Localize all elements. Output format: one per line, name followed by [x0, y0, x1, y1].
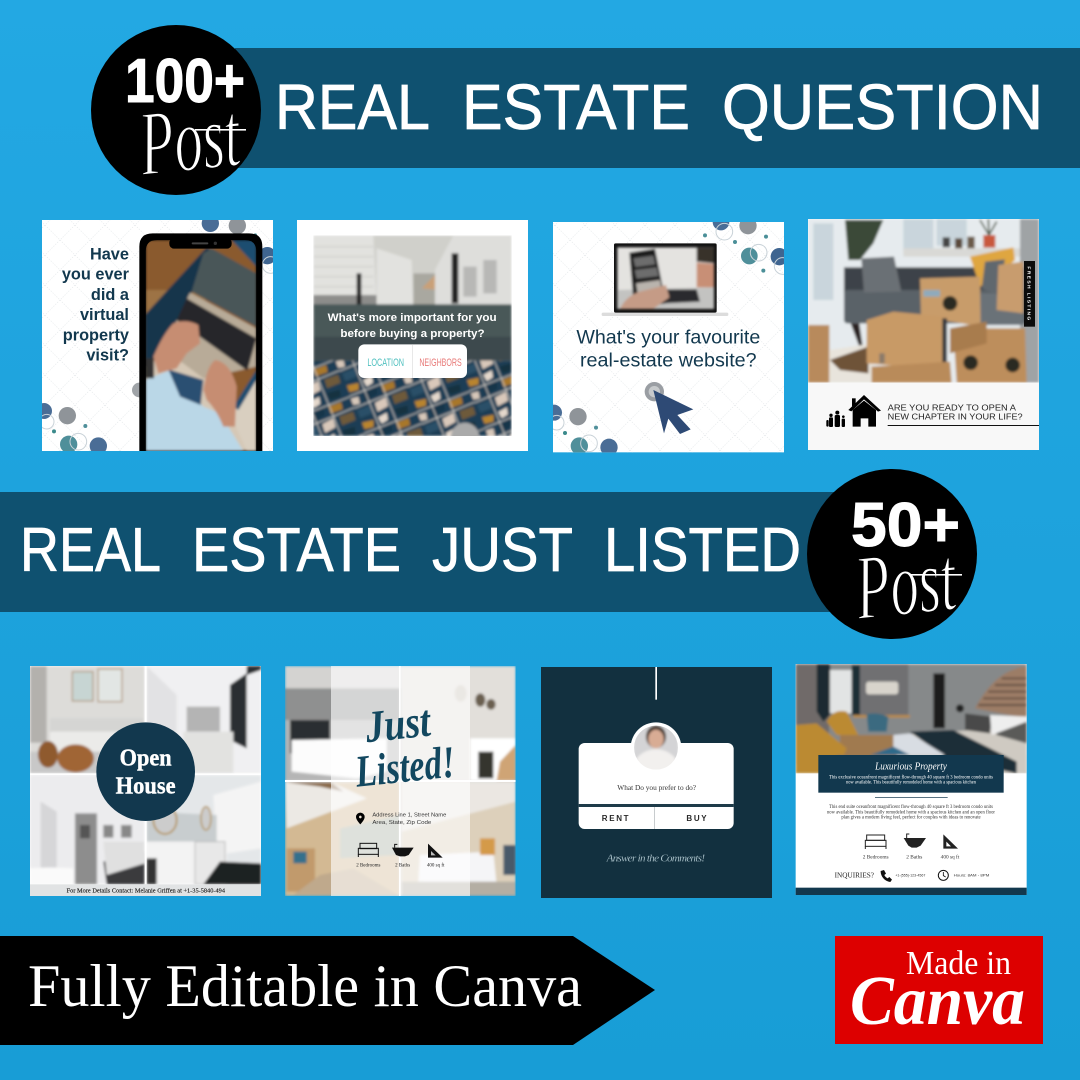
badge: made in canva: Made in [906, 945, 1011, 982]
badge: 100+ post: Post [134, 83, 246, 195]
badge: made in canva: Canva [850, 963, 1025, 1040]
property icons: 2 Bedrooms [863, 855, 889, 861]
question text [888, 403, 1023, 422]
heading banner: real estate just listed [0, 469, 977, 639]
title: real estate just listed: LISTED [604, 516, 801, 585]
icon: laptop with phone [602, 243, 728, 316]
body text: plan gives a modern living feel, perfect for couples with ideas to renovate [841, 815, 981, 820]
body text [827, 805, 995, 820]
badge: open house: House [116, 773, 176, 799]
post card: new chapter [808, 219, 1039, 450]
property icons: 2 Baths [906, 855, 922, 861]
post card: rent or buy [541, 667, 772, 898]
poll button: NEIGHBORS [419, 357, 462, 369]
inquiries row: INQUIRIES? [835, 872, 874, 880]
property icons [356, 843, 445, 869]
question text: you ever [62, 265, 130, 283]
property icons: 2 Baths [395, 864, 410, 869]
decorative dots [553, 222, 784, 452]
description panel [818, 755, 1004, 793]
four room photos with overlay [285, 666, 516, 896]
question text: before buying a property? [340, 328, 485, 340]
question text: Have [90, 245, 129, 263]
living room photo [808, 219, 1039, 383]
poll card: RENT [602, 814, 630, 823]
row two posts [30, 666, 516, 896]
poll card: What Do you prefer to do? [617, 783, 696, 792]
post card: luxurious property [796, 664, 1027, 895]
title: real estate just listed: JUST [432, 516, 573, 585]
inquiries row: Hours: 8AM - 8PM [954, 873, 989, 878]
phone with laptop photo [139, 233, 262, 451]
decorative dots [36, 215, 279, 455]
property icons: 400 sq ft [941, 854, 960, 861]
icon: cursor [645, 382, 693, 434]
script title: just listed [352, 695, 457, 797]
question text: What's your favourite [576, 328, 760, 349]
tag: fresh listing [1024, 261, 1035, 327]
description panel: This exclusive oceanfront magnificent flow-through 40 square ft 3 bedroom condo units [829, 775, 993, 780]
property icons: 400 sq ft [427, 864, 445, 869]
inquiries row: +1-(555)-123-4567 [895, 873, 926, 878]
question text [328, 312, 497, 340]
description panel: now available. This beautifully remodeled home with a spacious kitchen [846, 781, 977, 786]
property icons [863, 834, 960, 861]
question text [576, 328, 760, 372]
title: real estate question: REAL [275, 71, 430, 143]
property icons: 2 Bedrooms [356, 864, 381, 869]
address text: Address Line 1, Street Name [372, 813, 446, 819]
poll card: BUY [686, 814, 708, 823]
icon: location pin [356, 813, 365, 824]
title: real estate question: ESTATE [462, 71, 690, 143]
poll button: LOCATION [367, 357, 404, 369]
title: real estate question: QUESTION [722, 71, 1043, 143]
title: real estate just listed: REAL [20, 516, 161, 585]
bedroom photo [796, 664, 1027, 773]
title: real estate just listed [20, 516, 801, 585]
question text: did a [91, 286, 130, 304]
question text: real-estate website? [580, 351, 757, 372]
question text: virtual [80, 306, 129, 324]
poll button [358, 344, 467, 378]
body text: This end suite oceanfront magnificent flow-through 40 square ft 3 bedroom condo units [829, 805, 993, 810]
post card: favourite website [553, 222, 784, 452]
badge: 50+ post: 50+ [851, 491, 960, 560]
icon: family and house [826, 395, 881, 427]
contact strip: For More Details Contact: Melanie Griffen at +1-35-5840-494 [67, 887, 226, 894]
question text [62, 245, 130, 365]
post card: open house [30, 666, 261, 896]
avatar [631, 722, 681, 773]
question text: ARE YOU READY TO OPEN A [888, 403, 1017, 412]
heading banner: real estate question [91, 25, 1080, 195]
body text: now available. This beautifully remodeled home with a spacious kitchen and an open floor [827, 810, 995, 815]
address text [372, 813, 446, 826]
tag: fresh listing: FRESH LISTING [1026, 266, 1032, 322]
badge: made in canva [835, 936, 1043, 1044]
description panel: Luxurious Property [874, 762, 947, 773]
address text: Area, State, Zip Code [372, 820, 431, 826]
street and aerial photo [313, 235, 512, 451]
contact strip [30, 884, 261, 896]
title: real estate question [275, 71, 1043, 143]
question text: What's more important for you [328, 312, 497, 324]
question text: NEW CHAPTER IN YOUR LIFE? [888, 413, 1023, 422]
badge: 50+ post [807, 469, 977, 639]
four room photos [30, 666, 261, 884]
badge: 50+ post: Post [850, 527, 962, 639]
question text: property [63, 327, 129, 345]
post card: location or neighbors [297, 220, 528, 451]
title: real estate just listed: ESTATE [192, 516, 401, 585]
script title: just listed: Just [362, 695, 434, 752]
footer ribbon: fully editable in canva: Fully Editable in Canva [28, 953, 582, 1019]
badge: 100+ post [91, 25, 261, 195]
inquiries row [835, 870, 989, 882]
post card: virtual property visit [36, 215, 279, 455]
row one posts [36, 215, 528, 455]
footer ribbon: fully editable in canva [0, 936, 655, 1045]
badge: open house [96, 722, 195, 821]
badge: 100+ post: 100+ [125, 47, 245, 116]
question text: visit? [86, 347, 129, 365]
script title: just listed: Listed! [352, 737, 457, 797]
badge: open house: Open [120, 746, 172, 772]
post card: just listed [285, 666, 516, 896]
poll card [579, 743, 734, 829]
script caption: Answer in the Comments! [606, 853, 705, 865]
